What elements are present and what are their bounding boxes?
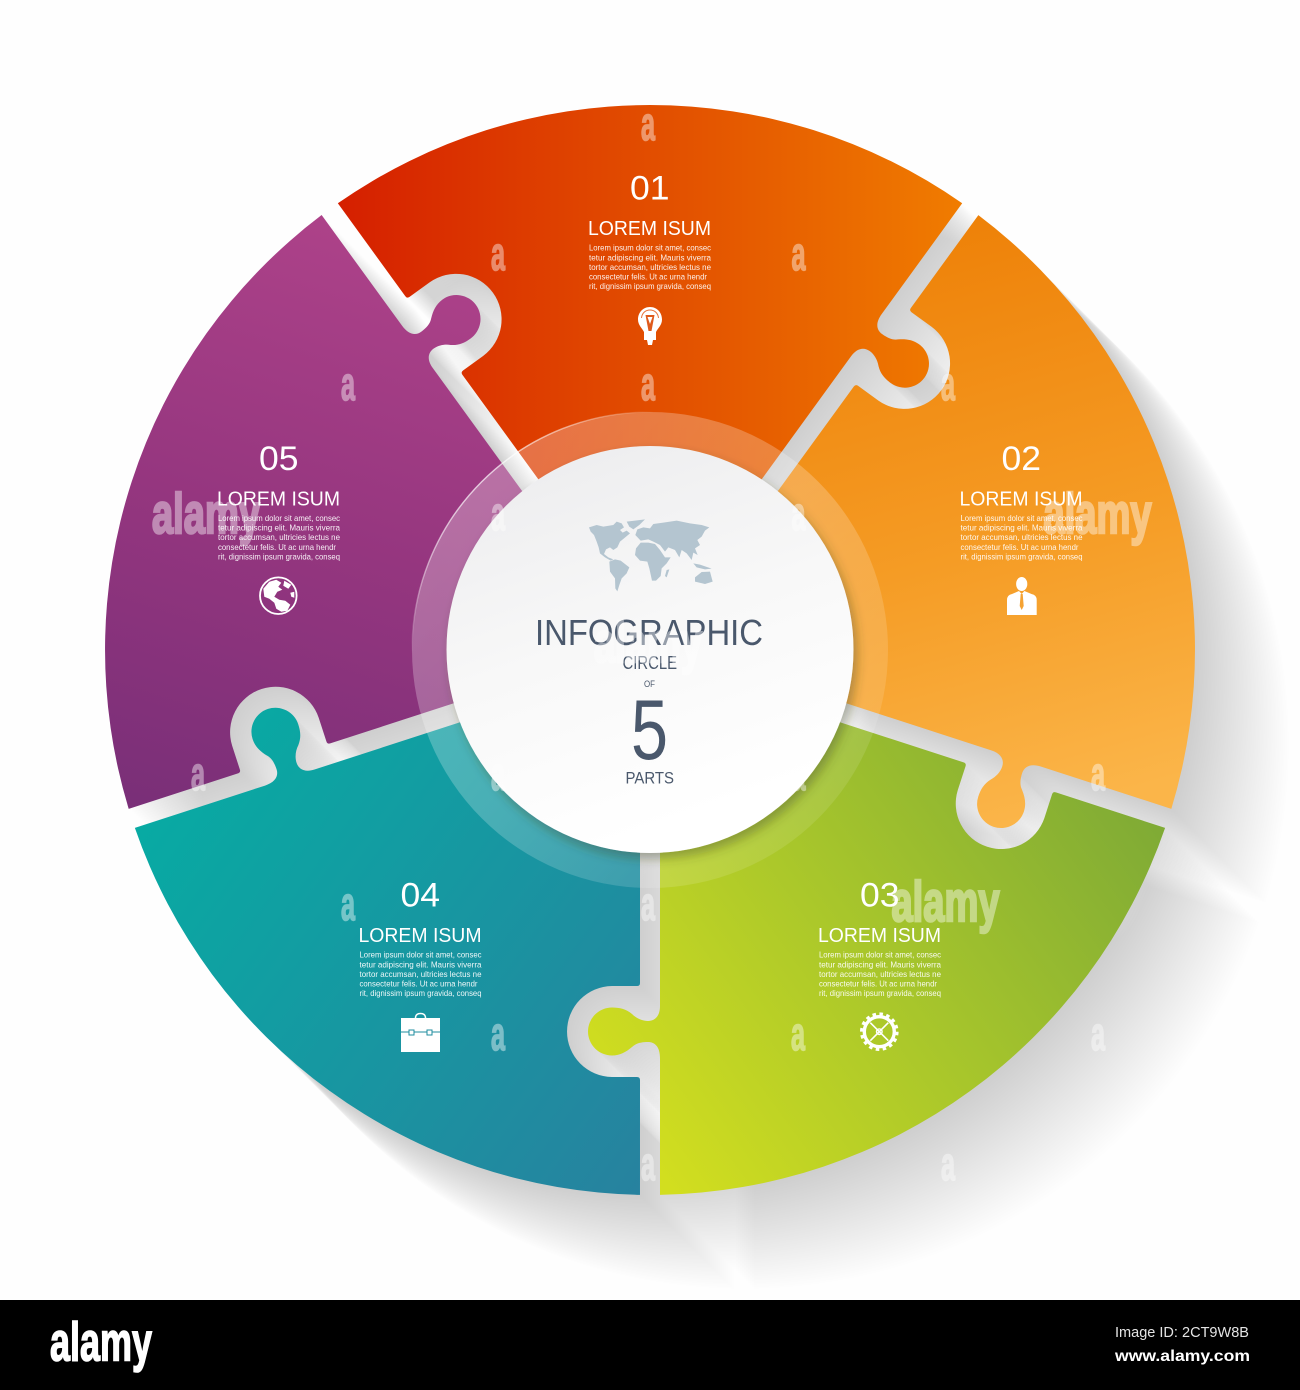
text block 04: 04: [400, 876, 440, 914]
text block 02: tortor accumsan, ultricies lectus ne: [960, 532, 1083, 542]
panel: 02 orange piece: [684, 177, 1300, 877]
piece 03 shape: [588, 706, 1165, 1195]
piece 04 shape: [113, 608, 756, 1308]
icon: businessman: [1007, 577, 1037, 615]
watermark letters: a: [641, 357, 655, 410]
watermark logos: alamy: [892, 870, 1000, 934]
text block 02: consectetur felis. Ut ac urna hendr: [960, 542, 1079, 552]
text block 03: tortor accumsan, ultricies lectus ne: [819, 969, 941, 979]
panel: 04 teal piece: [113, 608, 756, 1308]
text block 05: rit, dignissim ipsum gravida, conseq: [218, 551, 340, 561]
centre title: 5: [631, 683, 668, 778]
centre title: OF: [644, 679, 655, 689]
text block 01: Lorem ipsum dolor sit amet, consec: [589, 243, 712, 253]
text block 04: tetur adipiscing elit. Mauris viverra: [360, 959, 482, 969]
text block 05: tortor accumsan, ultricies lectus ne: [218, 532, 340, 542]
panel: 05 purple piece: [0, 173, 667, 908]
watermark letters: a: [941, 357, 955, 410]
watermark letters: a: [941, 1137, 955, 1190]
piece 02 shape: [684, 177, 1300, 877]
text block 02: rit, dignissim ipsum gravida, conseq: [960, 551, 1083, 561]
watermark logos: alamy: [1044, 482, 1152, 546]
text block 03: consectetur felis. Ut ac urna hendr: [819, 978, 937, 988]
icon: light bulb: [638, 307, 662, 345]
watermark logos: [152, 482, 1152, 934]
text block 04: [358, 876, 482, 998]
text block 05: [217, 440, 341, 561]
watermark letters: a: [792, 747, 806, 800]
watermark letters: a: [792, 227, 806, 280]
centre title: INFOGRAPHIC: [535, 612, 763, 653]
text block 01: rit, dignissim ipsum gravida, conseq: [589, 281, 711, 291]
text block 03: tetur adipiscing elit. Mauris viverra: [819, 959, 941, 969]
watermark letters: a: [1091, 747, 1105, 800]
text block 01: tetur adipiscing elit. Mauris viverra: [589, 252, 711, 262]
text block 05: tetur adipiscing elit. Mauris viverra: [218, 523, 340, 533]
text block 02: 02: [1002, 440, 1041, 478]
watermark logos: alamy: [152, 482, 260, 546]
icon: briefcase: [401, 1014, 440, 1052]
watermark letters: a: [641, 877, 655, 930]
world map: [589, 519, 713, 591]
watermark logos: alamy: [594, 611, 702, 675]
text block 01: consectetur felis. Ut ac urna hendr: [589, 272, 707, 282]
text block 02: Lorem ipsum dolor sit amet, consec: [960, 513, 1083, 523]
footer bar: [0, 1300, 1300, 1390]
text block 03: LOREM ISUM: [818, 925, 941, 947]
text block 03: Lorem ipsum dolor sit amet, consec: [819, 950, 942, 960]
panel: 03 green piece: [588, 706, 1165, 1195]
watermark letters: a: [341, 357, 355, 410]
text block 04: rit, dignissim ipsum gravida, conseq: [360, 988, 482, 998]
text block 01: LOREM ISUM: [588, 218, 711, 240]
watermark letters: a: [641, 97, 655, 150]
text block 03: 03: [860, 876, 900, 914]
text block 04: LOREM ISUM: [358, 925, 482, 947]
watermark letters: a: [191, 747, 205, 800]
watermark letters: a: [491, 1007, 505, 1060]
text block 05: Lorem ipsum dolor sit amet, consec: [218, 513, 341, 523]
text block 05: LOREM ISUM: [217, 488, 340, 510]
text block 04: Lorem ipsum dolor sit amet, consec: [360, 950, 482, 960]
text block 05: 05: [259, 440, 298, 478]
watermark letters: a: [1091, 1007, 1105, 1060]
centre title: [535, 612, 763, 788]
icon: globe: [260, 577, 297, 614]
text block 04: tortor accumsan, ultricies lectus ne: [360, 969, 482, 979]
footer logo: alamy: [50, 1310, 152, 1372]
text block 02: LOREM ISUM: [960, 488, 1082, 510]
watermark letters: a: [341, 877, 355, 930]
watermark letters: a: [791, 1007, 805, 1060]
text block 01: tortor accumsan, ultricies lectus ne: [589, 262, 711, 272]
watermark letters: a: [792, 487, 806, 540]
icon: gear: [862, 1014, 897, 1049]
text block 05: consectetur felis. Ut ac urna hendr: [218, 542, 336, 552]
watermark letters: a: [641, 1137, 655, 1190]
text block 02: tetur adipiscing elit. Mauris viverra: [960, 523, 1083, 533]
footer url: www.alamy.com: [1114, 1348, 1250, 1365]
text block 04: consectetur felis. Ut ac urna hendr: [360, 978, 478, 988]
text block 01: 01: [630, 170, 670, 208]
watermark letters: [191, 97, 1105, 1190]
piece 05 shape: [0, 173, 667, 908]
footer image id: Image ID: 2CT9W8B: [1115, 1324, 1249, 1341]
text block 03: rit, dignissim ipsum gravida, conseq: [819, 988, 941, 998]
watermark letters: a: [491, 747, 505, 800]
centre disc: [446, 446, 854, 853]
text block 01: [588, 170, 712, 291]
panel: 01 red piece: [266, 0, 1020, 641]
watermark letters: a: [491, 227, 505, 280]
centre title: CIRCLE: [622, 653, 677, 673]
centre title: PARTS: [626, 770, 674, 788]
glass ring: [412, 412, 888, 888]
piece 01 shape: [266, 0, 1020, 641]
text block 02: [960, 440, 1083, 561]
text block 03: [818, 876, 942, 998]
watermark letters: a: [491, 487, 505, 540]
